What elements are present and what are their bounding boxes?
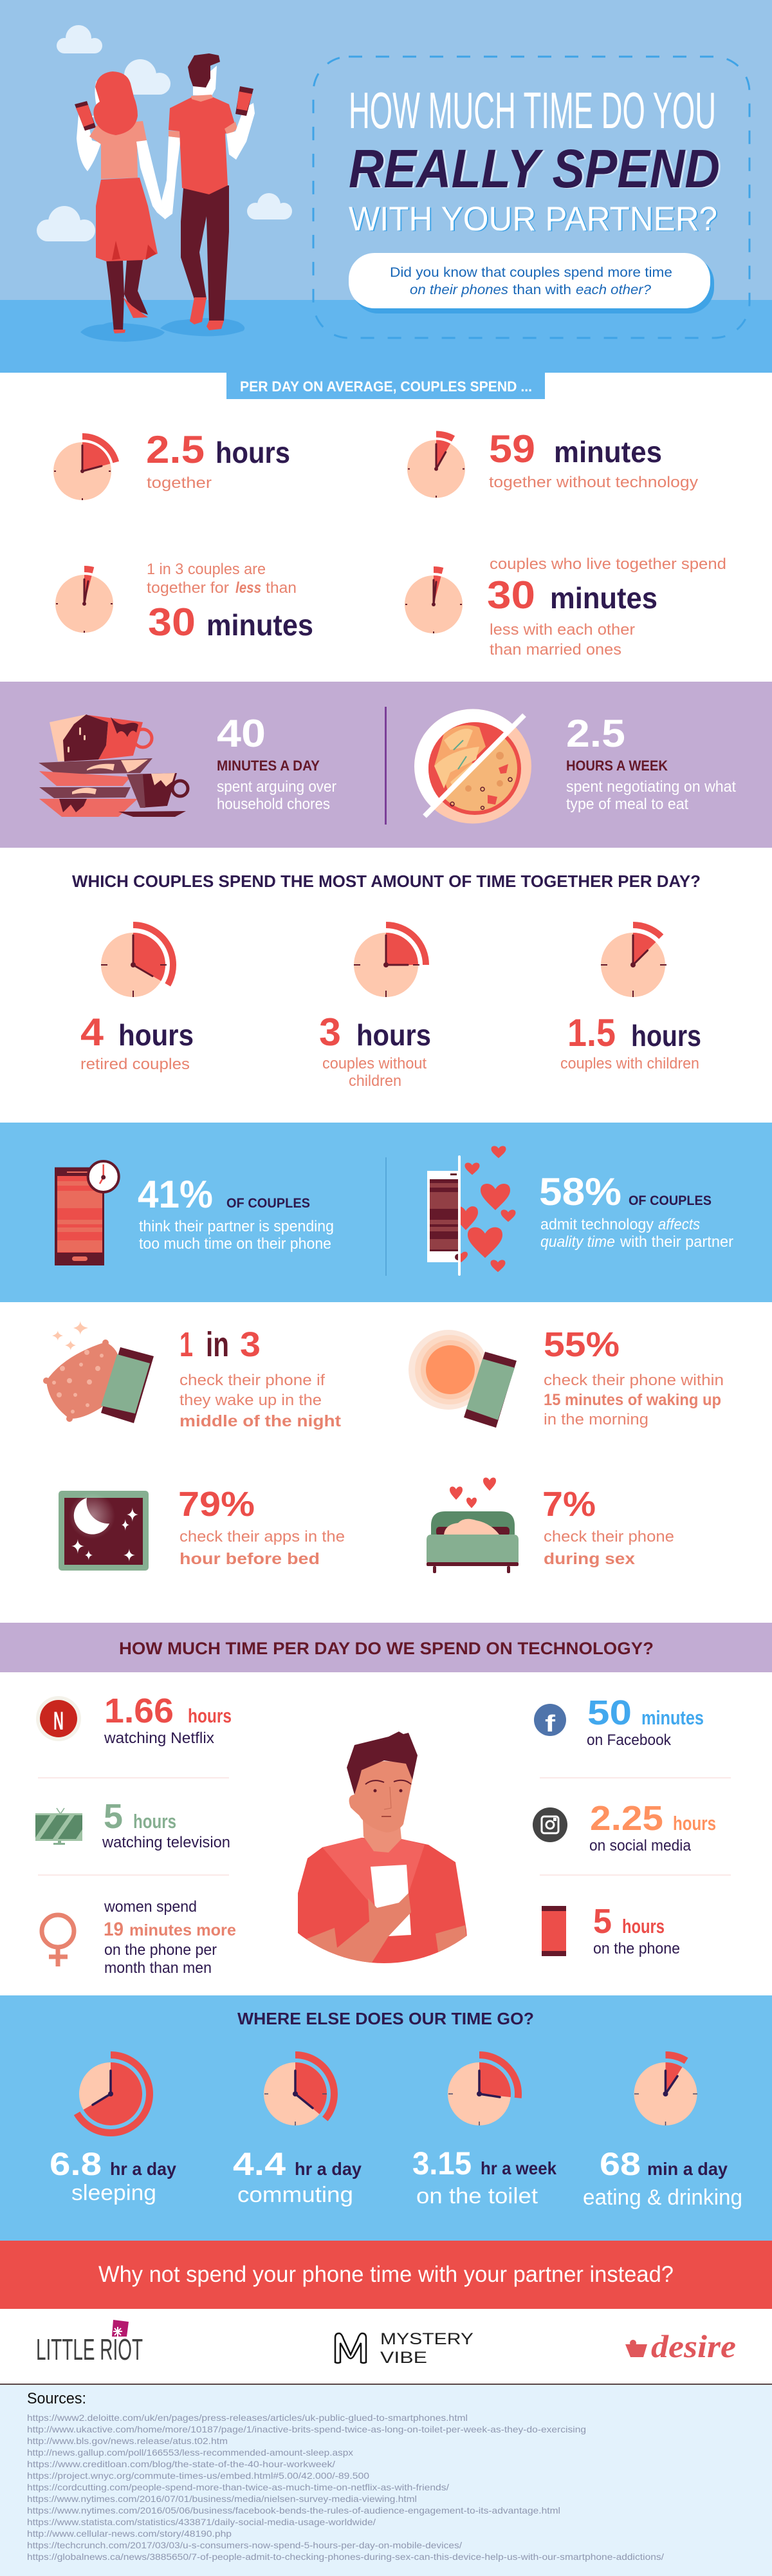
stat: on the phone: 5 (593, 1902, 612, 1941)
sources panel: https://project.wnyc.org/commute-times-us/embed.html#5.00/42.000/-89.500 (27, 2470, 369, 2481)
logo: mystery vibe (335, 2330, 473, 2367)
stat: 7% during sex (542, 1485, 674, 1568)
banner: per day on average (226, 373, 545, 399)
stat: 79% hour before bed (178, 1485, 345, 1568)
title emphasis: really spend: REALLY SPEND (351, 139, 722, 200)
icon: television (35, 1808, 82, 1845)
stat: 79% hour before bed: 79% (178, 1485, 255, 1524)
icon: netflix (36, 1696, 81, 1741)
icon: sun with phone (409, 1330, 517, 1428)
callout pill: Did you know that couples spend more time (390, 265, 672, 280)
stat: 1 in 3 couples less than 30 minutes: minutes (207, 608, 313, 642)
stat: 58% of couples: with their partner (620, 1233, 733, 1251)
stat: 2.5 hours a week negotiating: spent negotiating on what (566, 778, 736, 796)
stat: 79% hour before bed: check their apps in the (179, 1528, 345, 1545)
stat: eating and drinking: 68 (600, 2146, 641, 2182)
call to action band: Why not spend your phone time with your partner instead? (98, 2262, 674, 2287)
stat: television (102, 1797, 230, 1851)
stat: 1 in 3 couples less than 30 minutes: than (266, 579, 297, 597)
stat: commuting: commuting (237, 2183, 353, 2207)
stat: 59 minutes together without technology: minutes (554, 435, 662, 469)
clock: 2.5 hours (53, 436, 116, 500)
panel: blue phone stats band (0, 1123, 772, 1302)
stat: netflix: 1.66 (104, 1692, 174, 1730)
stat: 1.5 hours couples with children: couples with children (560, 1055, 699, 1072)
stat: commuting (233, 2146, 362, 2207)
clock: toilet (448, 2055, 519, 2125)
stat: sleeping: sleeping (71, 2181, 156, 2205)
clock: 30 minutes less (405, 570, 463, 633)
panel: chores and meals band (0, 682, 772, 848)
stat: 58% of couples: quality time (540, 1233, 615, 1251)
sources heading: Sources: (27, 2390, 86, 2407)
illustration: couple holding hands looking at phones (75, 53, 255, 342)
callout pill: on their phones (410, 283, 509, 297)
sources panel: https://www.nytimes.com/2016/07/01/business/media/nielsen-survey-media-viewing.html (27, 2494, 417, 2504)
clock: 30 minutes (55, 569, 113, 633)
stat: 1 in 3 check phone at night (179, 1325, 342, 1430)
stat: 40 minutes a day arguing: MINUTES A DAY (217, 758, 320, 774)
hero background (0, 0, 772, 373)
stat: sleeping (50, 2146, 176, 2205)
stat: 2.5 hours a week negotiating (566, 712, 736, 813)
stat: eating and drinking (583, 2146, 742, 2210)
stat: 1 in 3 check phone at night: 3 (240, 1325, 261, 1364)
stat: 2.5 hours a week negotiating: 2.5 (566, 712, 625, 755)
stat: 79% hour before bed: hour before bed (179, 1550, 320, 1568)
icon: netflix: N (53, 1707, 64, 1735)
stat: 1 in 3 couples less than 30 minutes: less (235, 579, 261, 597)
stat: 2.5 hours a week negotiating: type of meal to eat (566, 796, 688, 813)
stat: 55% within 15 minutes of waking: 15 minutes of waking up (544, 1391, 721, 1409)
icon: facebook: f (545, 1710, 556, 1737)
stat: 1 in 3 check phone at night: middle of the night (179, 1412, 342, 1430)
stat: 3 hours couples without children: hours (356, 1018, 431, 1052)
callout pill (349, 253, 714, 313)
stat: 59 minutes together without technology: 59 (489, 427, 535, 471)
icon: night window (59, 1491, 149, 1571)
stat: 3 hours couples without children: couples without (322, 1055, 427, 1072)
clock: 4 hours (101, 925, 173, 997)
stat: 4 hours retired couples (80, 1011, 194, 1073)
clock: 1.5 hours (601, 925, 666, 997)
panel: technology heading band (0, 1623, 772, 1672)
stat: 1 in 3 couples less than 30 minutes: 1 in 3 couples are (147, 561, 266, 578)
logo: desire: desire (651, 2328, 736, 2364)
stat: facebook (587, 1694, 704, 1749)
stat: 40 minutes a day arguing: 40 (217, 712, 266, 755)
stat: sleeping: 6.8 (50, 2146, 102, 2182)
stat: 1 in 3 check phone at night: check their phone if (179, 1372, 325, 1389)
stat: television: 5 (104, 1797, 123, 1836)
stat: 2.5 hours together: together (147, 474, 212, 492)
icon: female symbol (42, 1915, 74, 1966)
title line 3: WITH YOUR PARTNER? (350, 201, 719, 239)
stat: social media: 2.25 (590, 1799, 663, 1838)
clock: 3 hours (354, 925, 426, 997)
icon: phone (542, 1906, 566, 1956)
stat: 40 minutes a day arguing: household chores (217, 796, 330, 813)
stat: 1 in 3 couples less than 30 minutes: together for (147, 579, 229, 597)
icon: facebook (534, 1704, 566, 1737)
stat: 2.5 hours a week negotiating: HOURS A WEEK (566, 758, 668, 774)
logo: little riot: LITTLE RIOT (36, 2333, 143, 2366)
stat: 1 in 3 check phone at night: in (206, 1325, 229, 1364)
stat: netflix (104, 1692, 232, 1747)
stat: 1 in 3 couples less than 30 minutes: 30 (148, 601, 196, 644)
sources panel: https://www.creditloan.com/blog/the-state-of-the-40-hour-workweek/ (27, 2459, 335, 2469)
stat: 4 hours retired couples: retired couples (80, 1056, 190, 1073)
divider (386, 1157, 387, 1276)
stat: 58% of couples: 58% (539, 1170, 621, 1213)
stat: 2.5 hours together: hours (216, 436, 290, 469)
callout pill: than with (513, 283, 571, 297)
stat: 59 minutes together without technology (489, 427, 698, 491)
sources panel: http://www.cellular-news.com/story/48190.php (27, 2528, 232, 2539)
stat: 7% during sex: check their phone (544, 1528, 674, 1545)
stat: netflix: hours (188, 1704, 232, 1727)
stat: 41% of couples (138, 1173, 334, 1253)
stat: on the phone (593, 1902, 680, 1957)
stat: commuting: hr a day (295, 2159, 362, 2179)
stat: 41% of couples: OF COUPLES (226, 1196, 310, 1211)
callout pill: each other? (576, 283, 651, 297)
stat: women spend 19 minutes more: 19 (104, 1919, 124, 1940)
stat: eating and drinking: eating & drinking (583, 2185, 742, 2210)
stat: on the toilet: 3.15 (412, 2145, 472, 2181)
stat: social media: on social media (589, 1837, 692, 1854)
stat: social media (589, 1799, 716, 1854)
sources panel: http://www.ukactive.com/home/more/10187/page/1/inactive-brits-spend-twice-as-long-on-toilet-per-week-as-they-do-exercising (27, 2424, 586, 2434)
stat: eating and drinking: min a day (647, 2159, 728, 2179)
title panel with dashed border (313, 57, 749, 338)
panel: where else does our time go (0, 1995, 772, 2241)
sources panel: https://www.statista.com/statistics/433871/daily-social-media-usage-worldwide/ (27, 2517, 376, 2527)
stat: on the phone: on the phone (593, 1940, 680, 1957)
call to action band (0, 2241, 772, 2309)
sources panel: https://www.nytimes.com/2016/05/06/business/facebook-bends-the-rules-of-audience-engagement-to-its-advantage.html (27, 2505, 560, 2515)
stat: 7% during sex: 7% (542, 1485, 596, 1524)
stat: on the toilet: on the toilet (416, 2184, 538, 2208)
stat: 1.5 hours couples with children (560, 1011, 701, 1072)
clock: commuting (264, 2055, 334, 2125)
stat: 1 in 3 check phone at night: they wake up in the (179, 1392, 322, 1409)
stat: 55% within 15 minutes of waking (544, 1325, 724, 1428)
icon: half phone with hearts (427, 1146, 516, 1276)
stat: facebook: on Facebook (587, 1731, 672, 1749)
sources panel: https://globalnews.ca/news/3885650/7-of-people-admit-to-checking-phones-during-sex-can-this-device-help-us-with-our-smartphone-addictions/ (27, 2552, 664, 2562)
stat: women spend 19 minutes more (104, 1898, 236, 1977)
stat: 1 in 3 check phone at night: 1 (179, 1325, 193, 1364)
stat: 3 hours couples without children: 3 (319, 1011, 341, 1054)
logo: mystery vibe: VIBE (380, 2349, 427, 2367)
stat: 4 hours retired couples: hours (118, 1018, 194, 1052)
stat: women spend 19 minutes more: on the phone per (104, 1941, 217, 1959)
illustration: man holding phone (296, 1731, 470, 1970)
stat: 40 minutes a day arguing: spent arguing over (217, 778, 336, 796)
logo: mystery vibe: MYSTERY (380, 2330, 473, 2348)
stat: commuting: 4.4 (233, 2146, 286, 2182)
divider (385, 707, 387, 825)
stat: 55% within 15 minutes of waking: in the morning (544, 1411, 648, 1428)
title line 3: WITH YOUR PARTNER? (349, 200, 717, 238)
stat: 58% of couples: affects (658, 1216, 700, 1233)
stat: 2.5 hours together: 2.5 (146, 428, 205, 471)
stat: netflix: watching Netflix (104, 1730, 214, 1747)
stat: 41% of couples: 41% (138, 1173, 213, 1216)
stat: 40 minutes a day arguing (217, 712, 336, 813)
stat: women spend 19 minutes more: minutes more (129, 1921, 236, 1939)
stat: 55% within 15 minutes of waking: check their phone within (544, 1372, 724, 1389)
icon: bed with hearts (427, 1478, 519, 1573)
stat: couples who live together: couples who live together spend (490, 555, 726, 573)
sources panel: https://www2.deloitte.com/uk/en/pages/press-releases/articles/uk-public-glued-to-smartphones.html (27, 2413, 468, 2423)
sources panel: http://news.gallup.com/poll/166553/less-recommended-amount-sleep.aspx (27, 2447, 353, 2458)
title emphasis: really spend: REALLY SPEND (349, 138, 720, 199)
stat: 58% of couples: admit technology (540, 1216, 654, 1233)
icon: pizza and pasta plate (414, 709, 531, 824)
stat: couples who live together: 30 (487, 574, 535, 617)
stat: couples who live together: minutes (550, 581, 657, 615)
sources panel (0, 2384, 772, 2576)
stat: 1 in 3 couples less than 30 minutes (147, 561, 313, 644)
stat: facebook: 50 (587, 1694, 632, 1732)
stat: 7% during sex: during sex (544, 1550, 635, 1568)
stat: 58% of couples (539, 1170, 733, 1251)
logo: little riot (36, 2320, 143, 2366)
stat: 1.5 hours couples with children: hours (631, 1019, 701, 1052)
icon: clouds (37, 25, 292, 241)
icon: pillow with phone (43, 1321, 154, 1423)
heading: which couples: WHICH COUPLES SPEND THE MOST AMOUNT OF TIME TOGETHER PER DAY? (72, 872, 701, 891)
clock: 59 minutes (407, 434, 465, 498)
stat: 3 hours couples without children (319, 1011, 431, 1090)
stat: sleeping: hr a day (110, 2159, 176, 2179)
stat: women spend 19 minutes more: women spend (104, 1898, 197, 1916)
stat: 1.5 hours couples with children: 1.5 (567, 1011, 616, 1054)
stat: 4 hours retired couples: 4 (80, 1011, 104, 1054)
icon: instagram (533, 1807, 567, 1842)
stat: couples who live together: than married ones (490, 641, 621, 658)
stat: on the phone: hours (622, 1915, 665, 1937)
stat: 2.5 hours together (146, 428, 290, 492)
stat: on the toilet (412, 2145, 556, 2208)
stat: social media: hours (673, 1812, 716, 1834)
sources panel: https://cordcutting.com/people-spend-more-than-twice-as-much-time-on-netflix-as-with-friends/ (27, 2482, 449, 2492)
stat: 55% within 15 minutes of waking: 55% (544, 1325, 620, 1364)
stat: couples who live together: less with each other (490, 621, 635, 639)
clock: sleeping (77, 2055, 149, 2133)
clock: eating (634, 2055, 697, 2125)
stat: 3 hours couples without children: children (349, 1072, 401, 1090)
banner: per day on average: PER DAY ON AVERAGE, COUPLES SPEND ... (240, 378, 532, 395)
panel: technology heading band: HOW MUCH TIME PER DAY DO WE SPEND ON TECHNOLOGY? (119, 1639, 654, 1658)
stat: television: watching television (102, 1834, 230, 1851)
stat: facebook: minutes (641, 1706, 704, 1729)
sources panel: http://www.bls.gov/news.release/atus.t02.htm (27, 2436, 228, 2446)
stat: 41% of couples: think their partner is spending (139, 1218, 334, 1235)
sources panel: https://techcrunch.com/2017/03/03/u-s-consumers-now-spend-5-hours-per-day-on-mobile-devices/ (27, 2540, 462, 2550)
icon: dirty dishes (39, 714, 188, 817)
stat: television: hours (133, 1810, 176, 1833)
stat: 59 minutes together without technology: together without technology (489, 474, 698, 491)
stat: couples who live together (487, 555, 726, 658)
icon: phone with clock (55, 1161, 119, 1265)
stat: women spend 19 minutes more: month than men (104, 1959, 212, 1977)
heading: WHERE ELSE DOES OUR TIME GO? (237, 2009, 534, 2028)
stat: 58% of couples: OF COUPLES (629, 1193, 712, 1208)
stat: 41% of couples: too much time on their phone (139, 1235, 331, 1253)
stat: on the toilet: hr a week (481, 2158, 556, 2178)
